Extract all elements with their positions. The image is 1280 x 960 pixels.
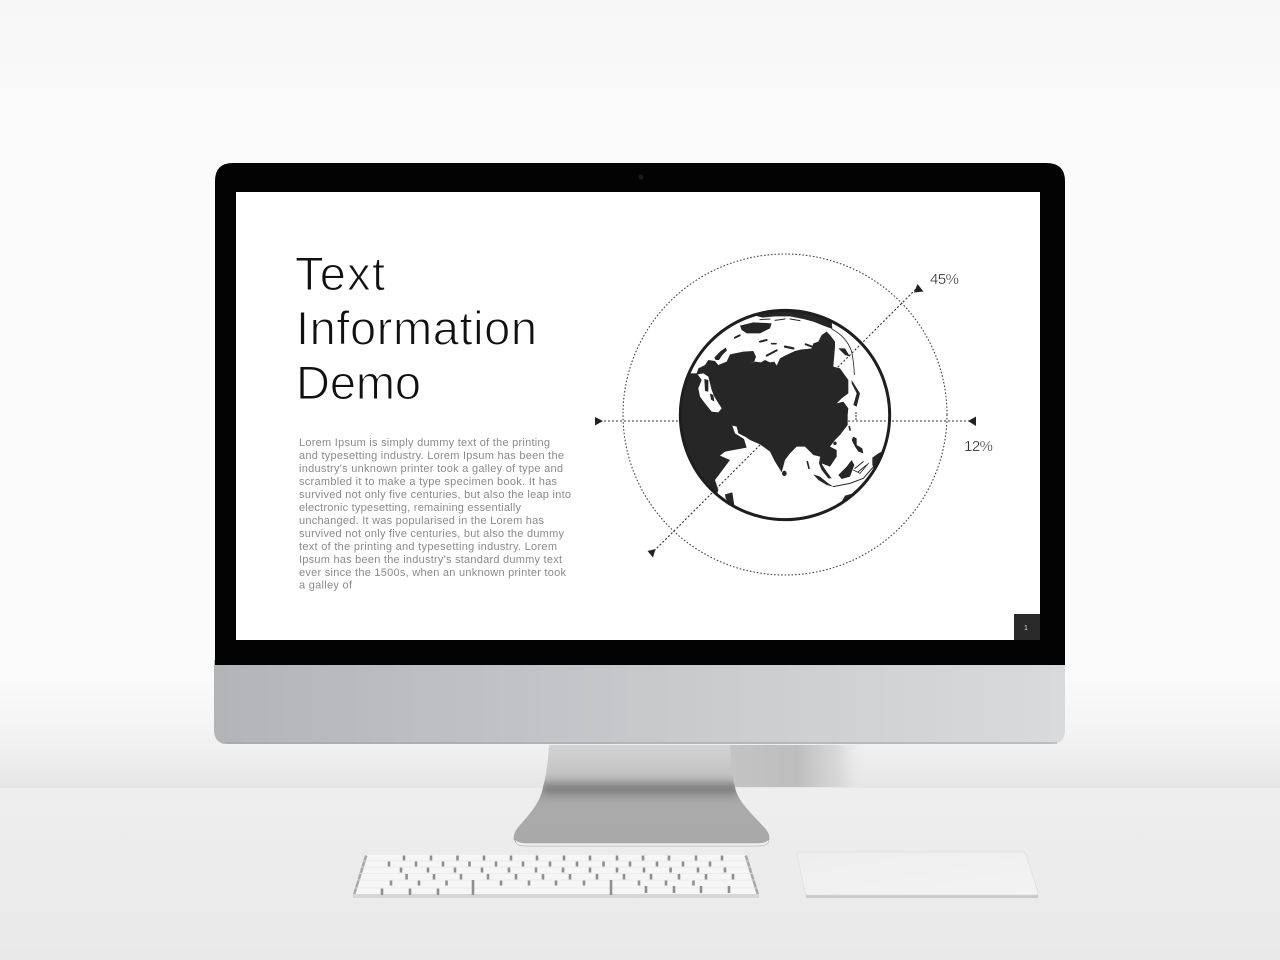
body text block: unchanged. It was popularised in the Lorem has (299, 515, 544, 527)
keyboard body (353, 855, 759, 898)
monitor black bezel (215, 163, 1065, 665)
body text block: a galley of (299, 580, 353, 592)
body text block: survived not only five centuries, but also the leap into (299, 489, 571, 501)
body text block: electronic typesetting, remaining essentially (299, 502, 522, 514)
body text block: Ipsum has been the industry's standard dummy text (299, 554, 562, 566)
monitor stand (514, 745, 769, 846)
islands in inland sea (704, 379, 714, 402)
body text block: survived not only five centuries, but also the dummy (299, 528, 564, 540)
land: Novaya Zemlya (740, 322, 772, 333)
trackpad (797, 852, 1038, 898)
label 45%: 45% (930, 271, 959, 288)
screen panel (236, 192, 1040, 640)
land: Africa horn (725, 492, 734, 506)
thin Kamchatka arc (832, 329, 854, 375)
land: Philippines (852, 437, 863, 453)
outer dotted orbit circle (623, 254, 947, 575)
title: Text (295, 247, 385, 300)
body text block: scrambled it to make a type specimen book. It has (299, 476, 558, 488)
diagonal dotted arrow (648, 284, 924, 558)
monitor (214, 163, 1065, 744)
small northern coast fragments (735, 319, 812, 356)
land: Sumatra (813, 474, 833, 487)
body text block: text of the printing and typesetting industry. Lorem (299, 541, 557, 553)
land: Japan (852, 380, 860, 407)
monitor chin lower edge (222, 742, 1057, 744)
small dots: Ryukyu and Taiwan (807, 412, 856, 468)
land: Sakhalin and Okhotsk coast (838, 348, 850, 357)
key row lines (354, 861, 758, 888)
land: Borneo (838, 460, 854, 479)
land: Australia edge (842, 484, 865, 502)
title: Information (296, 302, 537, 354)
globe white disc (680, 310, 890, 520)
land: Hainan (833, 442, 837, 445)
shadow on wall behind stand (730, 745, 865, 787)
globe outline ring (680, 310, 890, 520)
key separators (382, 856, 733, 895)
keyboard (353, 855, 759, 898)
keyboard side edges (353, 855, 759, 894)
body text block (299, 437, 571, 592)
horizontal dotted arrow (595, 416, 976, 426)
keyboard base edge (353, 894, 759, 898)
land: Malay Peninsula (819, 457, 832, 478)
body text block: Lorem Ipsum is simply dummy text of the printing (299, 437, 550, 449)
land: Sri Lanka (782, 471, 787, 476)
page number box: 1 (1024, 625, 1028, 632)
body text block: and typesetting industry. Lorem Ipsum has been the (299, 450, 564, 462)
title: Demo (296, 356, 421, 409)
sea: Mediterranean and Black Sea (698, 373, 722, 412)
land: New Guinea (872, 450, 885, 470)
title (295, 247, 537, 409)
land: Scandinavia fragment (714, 348, 727, 360)
land: Indonesian chain and Sulawesi (833, 462, 875, 487)
body text block: ever since the 1500s, when an unknown printer took (299, 567, 566, 579)
land: polar strip (753, 310, 832, 329)
body text block: industry's unknown printer took a galley of type and (299, 463, 563, 475)
monitor chin (214, 660, 1065, 744)
webcam (639, 175, 643, 179)
land: Eurasia and Africa (681, 332, 848, 495)
label 12%: 12% (964, 438, 993, 455)
page number box (1014, 614, 1040, 640)
globe with land masses (680, 310, 890, 520)
